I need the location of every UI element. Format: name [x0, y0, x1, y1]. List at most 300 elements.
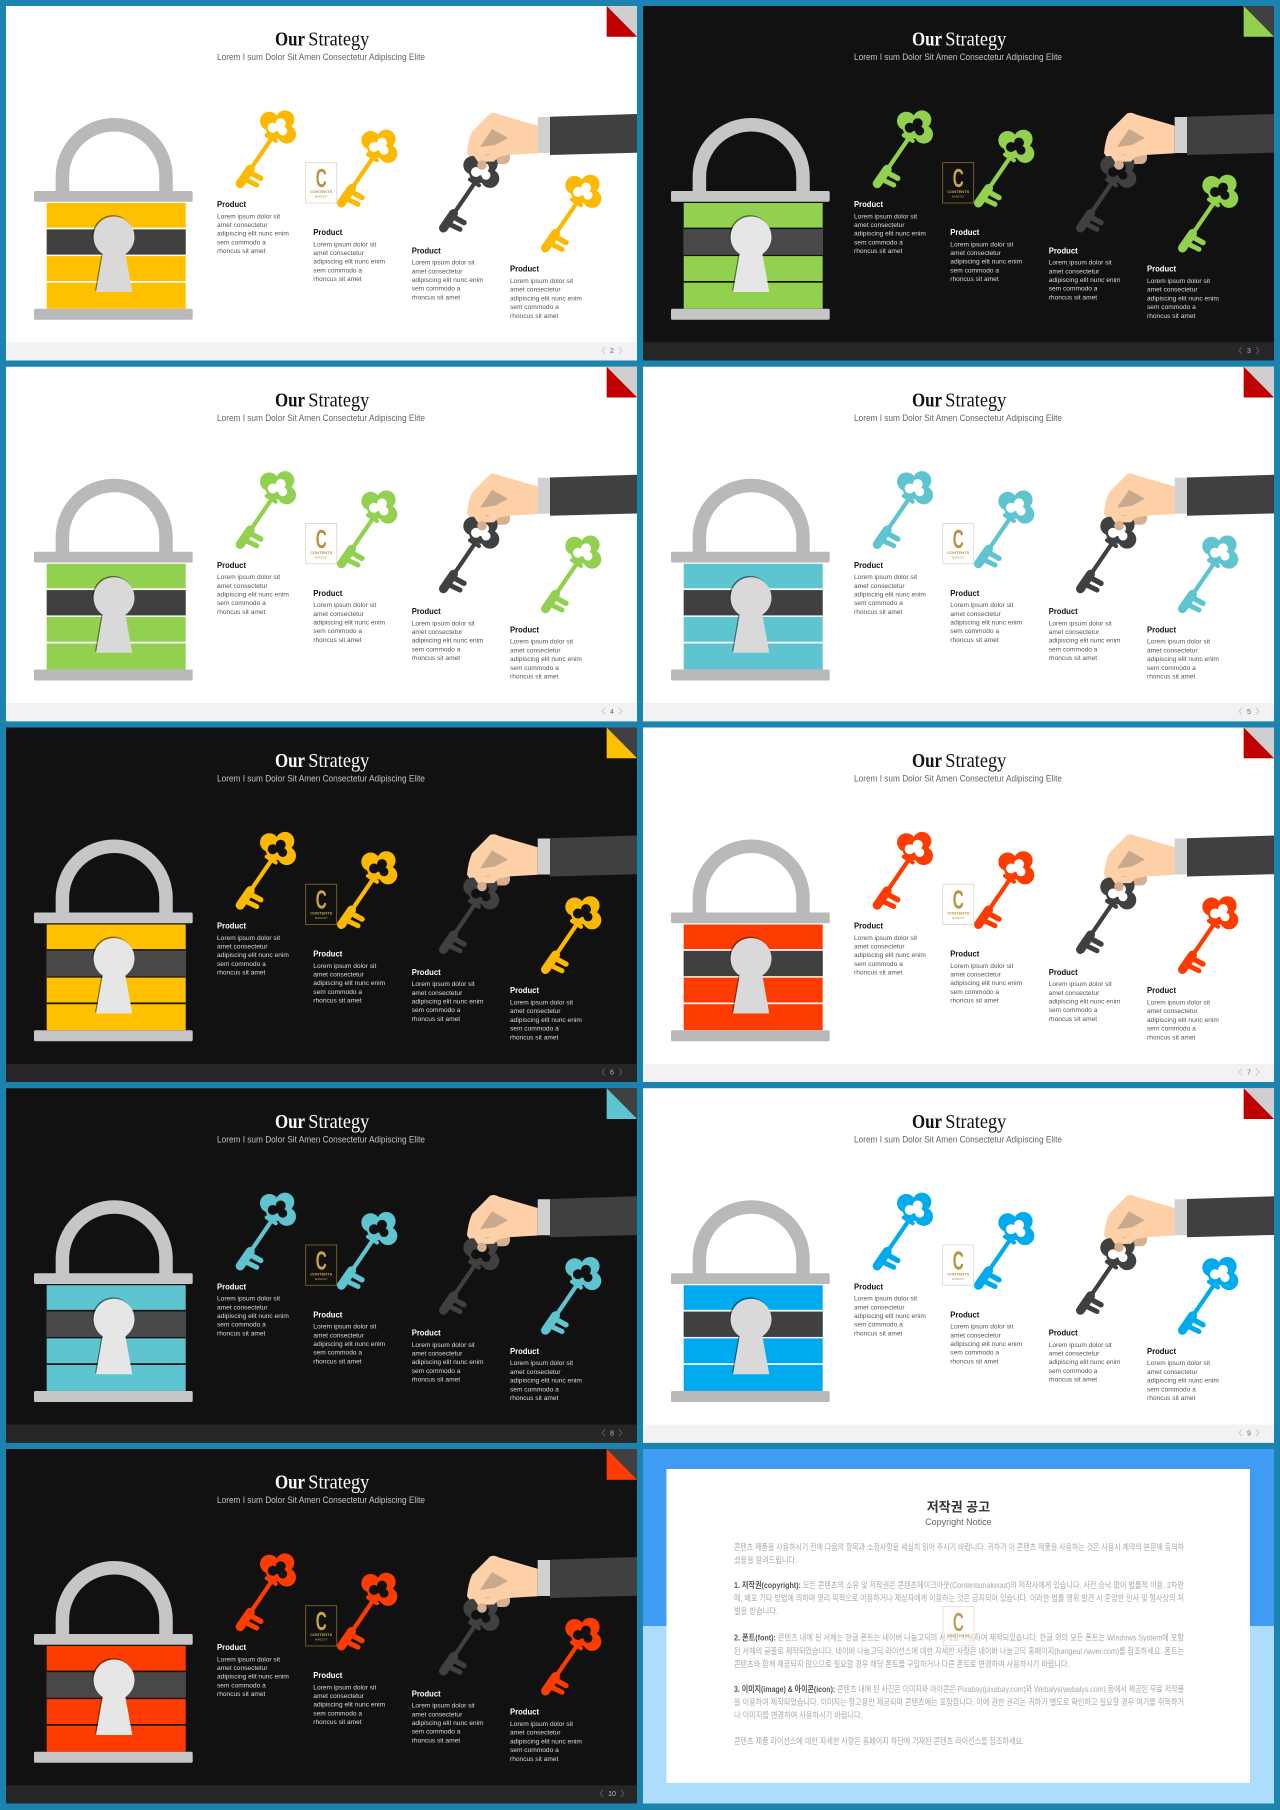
- text block: product 2: Product: [950, 227, 979, 237]
- text block: product 2: Lorem ipsum dolor sit: [313, 1324, 376, 1331]
- subtitle: Lorem I sum Dolor Sit Amen Consectetur Adipiscing Elite: [854, 1134, 1062, 1145]
- logo: CONTENTS: [310, 910, 333, 916]
- text block: product 1: Lorem ipsum dolor sit: [854, 935, 917, 942]
- heading: copyright title: 저작권 공고: [927, 1500, 990, 1514]
- page number: 2: [610, 348, 614, 355]
- panel: slide 4 light green: [6, 367, 637, 721]
- logo: CONTENTS: [310, 550, 333, 555]
- text block: product 4: rhoncus sit amet: [510, 674, 559, 681]
- icon: hand and sleeve: [467, 113, 637, 164]
- title: [275, 389, 369, 411]
- text block: product 1: Lorem ipsum dolor sit: [854, 1296, 917, 1303]
- text block: product 1: rhoncus sit amet: [854, 970, 903, 977]
- text block: product 2: Lorem ipsum dolor sit: [313, 241, 376, 248]
- logo: [306, 1245, 337, 1285]
- text block: product 3: sem commodo a: [412, 1729, 461, 1736]
- logo: CONTENTS: [947, 1271, 970, 1276]
- text block: product 3: rhoncus sit amet: [1049, 294, 1097, 301]
- icon: key 2: [978, 490, 1034, 565]
- logo: C: [316, 163, 327, 193]
- title: [912, 750, 1006, 772]
- title: Strategy: [308, 1111, 369, 1133]
- logo: CONTENTS: [947, 910, 970, 916]
- icon: key 1: [877, 471, 933, 546]
- text block: product 3: amet consectetur: [412, 629, 463, 636]
- logo: [306, 163, 337, 203]
- text block: product 2: amet consectetur: [950, 611, 1002, 618]
- text block: product 4: amet consectetur: [510, 1008, 561, 1015]
- text block: product 1: Product: [217, 1281, 246, 1291]
- text block: product 4: sem commodo a: [1147, 304, 1196, 311]
- text block: product 2: amet consectetur: [313, 250, 365, 257]
- icon: key 1: [877, 832, 933, 906]
- text block: product 3: adipiscing elit nunc enim: [412, 638, 484, 645]
- panel: slide 2 light yellow: [6, 6, 637, 360]
- text block: product 1: Lorem ipsum dolor sit: [217, 935, 280, 942]
- text block: product 2: sem commodo a: [950, 989, 999, 996]
- text block: product 3: rhoncus sit amet: [1049, 1016, 1097, 1023]
- corner flag: [607, 1088, 637, 1119]
- text block: product 3: adipiscing elit nunc enim: [412, 1359, 484, 1366]
- text block: product 3: sem commodo a: [1049, 1368, 1098, 1375]
- logo: CONTENTS: [310, 1271, 333, 1276]
- text block: product 1: [854, 199, 926, 255]
- icon: key 4: [546, 896, 601, 971]
- title: Our: [275, 29, 305, 51]
- title: [912, 1111, 1006, 1133]
- text block: product 2: Product: [950, 1309, 979, 1319]
- text block: product 1: amet consectetur: [217, 944, 268, 950]
- text block: product 4: amet consectetur: [510, 647, 561, 654]
- icon: key 4: [546, 175, 601, 249]
- text block: product 1: Product: [854, 920, 883, 930]
- text block: product 2: Lorem ipsum dolor sit: [950, 1324, 1013, 1331]
- logo: [306, 523, 337, 564]
- text block: product 2: adipiscing elit nunc enim: [950, 1341, 1023, 1348]
- text block: product 3: amet consectetur: [412, 990, 463, 997]
- text block: product 3: sem commodo a: [1049, 286, 1098, 293]
- icon: key 1: [240, 471, 296, 546]
- text block: product 2: rhoncus sit amet: [313, 1358, 362, 1365]
- text block: product 3: adipiscing elit nunc enim: [412, 1720, 484, 1727]
- logo: C: [316, 884, 327, 914]
- text block: image and icon clause: 나 이미지를 변경하여 사용하시기 바랍니다.: [734, 1710, 863, 1720]
- text block: product 2: sem commodo a: [950, 628, 999, 635]
- icon: key 4: [1182, 1257, 1238, 1332]
- text block: product 1: Product: [217, 560, 246, 570]
- icon: dark key held by hand: [1080, 155, 1136, 229]
- text block: product 1: adipiscing elit nunc enim: [217, 591, 289, 598]
- corner flag: [607, 728, 637, 758]
- panel: slide 8 dark teal: [6, 1088, 637, 1443]
- text block: product 1: amet consectetur: [854, 222, 905, 229]
- text block: product 4: Product: [1147, 1346, 1176, 1356]
- text block: product 3: Lorem ipsum dolor sit: [412, 1703, 475, 1710]
- text block: copyright clause: 벌을 받습니다.: [734, 1606, 778, 1616]
- text block: product 4: sem commodo a: [1147, 1026, 1196, 1033]
- page number: 5: [1247, 709, 1251, 716]
- text block: product 4: adipiscing elit nunc enim: [1147, 1378, 1219, 1385]
- text block: product 1: rhoncus sit amet: [217, 609, 266, 616]
- text block: product 4: Lorem ipsum dolor sit: [1147, 1360, 1210, 1367]
- icon: finger through key: [1111, 1236, 1138, 1252]
- icon: key 1: [877, 110, 933, 185]
- text block: product 1: Product: [217, 920, 246, 930]
- text block: product 4: rhoncus sit amet: [510, 1034, 559, 1041]
- text block: product 4: adipiscing elit nunc enim: [510, 1738, 582, 1745]
- logo: [943, 163, 974, 203]
- text block: product 2: rhoncus sit amet: [950, 276, 999, 283]
- text block: product 1: amet consectetur: [217, 222, 268, 229]
- text block: product 2: [950, 948, 1023, 1005]
- text block: product 3: adipiscing elit nunc enim: [1049, 638, 1121, 645]
- text block: product 3: Product: [412, 1328, 441, 1338]
- text block: product 4: Lorem ipsum dolor sit: [510, 1721, 573, 1728]
- text block: product 1: sem commodo a: [217, 961, 266, 968]
- text block: product 3: sem commodo a: [412, 646, 461, 653]
- text block: product 4: [510, 985, 582, 1041]
- text block: product 2: adipiscing elit nunc enim: [950, 259, 1023, 266]
- text block: introduction: 셨음을 알려드립니다.: [734, 1555, 797, 1565]
- logo: [943, 884, 974, 924]
- text block: closing note: 콘텐츠 제품 라이선스에 대한 자세한 사항은 홈페이지 하단에 기재된 콘텐츠 라이선스를 참조하세요.: [734, 1736, 1024, 1746]
- subtitle: Lorem I sum Dolor Sit Amen Consectetur Adipiscing Elite: [854, 413, 1062, 424]
- text block: product 4: amet consectetur: [1147, 647, 1198, 654]
- panel: slide 6 dark yellow: [6, 728, 637, 1082]
- logo: watermark: C: [953, 1607, 964, 1637]
- subheading: copyright notice: Copyright Notice: [925, 1517, 992, 1527]
- text block: product 3: Product: [1049, 245, 1078, 255]
- text block: product 4: Product: [510, 985, 539, 995]
- text block: product 2: Product: [950, 588, 979, 598]
- text block: product 4: amet consectetur: [1147, 287, 1198, 294]
- logo: MAKEOUT: [315, 1277, 328, 1281]
- text block: product 4: sem commodo a: [510, 665, 559, 672]
- text block: product 1: adipiscing elit nunc enim: [854, 591, 926, 598]
- text block: font clause: 콘텐츠와 함께 제공되지 않으므로 필요할 경우 해당 폰트를 구입하거나 다른 폰트로 변경하여 사용하시기 바랍니다.: [734, 1659, 1070, 1669]
- title: Our: [275, 1472, 305, 1494]
- icon: padlock: [671, 485, 830, 680]
- page number: [602, 708, 622, 716]
- icon: hand and sleeve: [1104, 113, 1274, 164]
- corner flag: [607, 367, 637, 397]
- text block: product 4: [510, 1346, 582, 1402]
- text block: product 3: Lorem ipsum dolor sit: [1049, 981, 1112, 988]
- icon: key 2: [342, 1573, 397, 1647]
- text block: product 3: [412, 967, 484, 1023]
- text block: product 4: Product: [1147, 624, 1176, 634]
- title: Strategy: [945, 750, 1006, 772]
- text block: product 2: Lorem ipsum dolor sit: [950, 963, 1013, 970]
- icon: finger through key: [474, 1236, 501, 1252]
- text block: product 3: Lorem ipsum dolor sit: [1049, 620, 1112, 627]
- page number: [1239, 347, 1259, 355]
- text block: product 4: rhoncus sit amet: [510, 313, 559, 320]
- text block: product 3: Lorem ipsum dolor sit: [1049, 1342, 1112, 1349]
- logo: MAKEOUT: [952, 555, 965, 559]
- text block: product 2: sem commodo a: [313, 628, 362, 635]
- text block: product 2: sem commodo a: [313, 1710, 362, 1717]
- panel: slide 9 light blue: [643, 1088, 1274, 1443]
- text block: product 3: Product: [1049, 967, 1078, 977]
- icon: padlock: [34, 1207, 193, 1402]
- text block: product 2: adipiscing elit nunc enim: [950, 980, 1023, 987]
- icon: key 2: [342, 130, 397, 204]
- icon: key 1: [877, 1193, 933, 1267]
- text block: product 3: adipiscing elit nunc enim: [1049, 999, 1121, 1006]
- text block: product 3: Product: [412, 606, 441, 616]
- icon: dark key held by hand: [1080, 876, 1136, 951]
- text block: product 1: adipiscing elit nunc enim: [217, 231, 289, 238]
- text block: product 3: sem commodo a: [1049, 646, 1098, 653]
- text block: product 4: Lorem ipsum dolor sit: [510, 278, 573, 285]
- panel: slide 7 light orange-red: [643, 728, 1274, 1082]
- panel: slide 10 dark orange-red: [6, 1449, 637, 1804]
- title: [912, 29, 1006, 51]
- text block: product 1: adipiscing elit nunc enim: [854, 1313, 926, 1320]
- text block: product 3: Lorem ipsum dolor sit: [412, 981, 475, 988]
- text block: product 1: Lorem ipsum dolor sit: [217, 213, 280, 220]
- text block: product 1: amet consectetur: [854, 583, 905, 590]
- title: Our: [275, 389, 305, 411]
- text block: product 1: adipiscing elit nunc enim: [217, 952, 289, 959]
- text block: product 3: [1049, 967, 1121, 1023]
- icon: key 1: [240, 1553, 296, 1628]
- icon: key 4: [1182, 175, 1238, 249]
- text block: product 1: Lorem ipsum dolor sit: [854, 574, 917, 581]
- text block: product 4: adipiscing elit nunc enim: [1147, 295, 1219, 302]
- text block: font clause: 된 서체의 글꼴로 제작되었습니다. 네이버 나눔고딕 라이선스에 대한 자세한 사항은 네이버 나눔고딕 홈페이지(hangeul.naver.com)를 참조하세요. 폰트는: [734, 1646, 1184, 1656]
- title: Strategy: [308, 750, 369, 772]
- icon: dark key held by hand: [444, 1598, 499, 1672]
- icon: hand and sleeve: [1104, 473, 1274, 525]
- text block: product 4: sem commodo a: [510, 1747, 559, 1754]
- text block: product 4: [1147, 624, 1219, 681]
- text block: product 4: adipiscing elit nunc enim: [510, 1017, 582, 1024]
- text block: product 3: amet consectetur: [1049, 1351, 1100, 1358]
- text block: product 1: rhoncus sit amet: [217, 1691, 266, 1698]
- title: Strategy: [945, 389, 1006, 411]
- text block: product 2: [313, 1309, 386, 1365]
- text block: product 3: adipiscing elit nunc enim: [1049, 1359, 1121, 1366]
- text block: font clause: 2. 폰트(font): 콘텐츠 내에 된 서체는 한글 폰트는 네이버 나눔고딕의 서체를 사용하여 제작되었습니다. 한글 외의 모든 폰트는 Windows System에 포함: [734, 1633, 1184, 1643]
- text block: product 2: [950, 227, 1023, 283]
- subtitle: Lorem I sum Dolor Sit Amen Consectetur Adipiscing Elite: [217, 52, 425, 63]
- text block: product 1: sem commodo a: [854, 239, 903, 246]
- icon: finger through key: [1111, 154, 1138, 170]
- subtitle: Lorem I sum Dolor Sit Amen Consectetur Adipiscing Elite: [217, 413, 425, 424]
- page number: 10: [608, 1791, 616, 1798]
- text block: product 2: amet consectetur: [313, 1332, 365, 1339]
- text block: product 4: adipiscing elit nunc enim: [510, 295, 582, 302]
- text block: product 3: Product: [412, 1688, 441, 1698]
- text block: product 2: rhoncus sit amet: [313, 276, 362, 283]
- icon: padlock: [34, 1568, 193, 1763]
- text block: product 3: adipiscing elit nunc enim: [412, 999, 484, 1006]
- icon: finger through key: [1111, 876, 1138, 891]
- icon: padlock: [34, 846, 193, 1041]
- text block: product 4: [1147, 985, 1219, 1041]
- text block: product 1: amet consectetur: [854, 944, 905, 950]
- logo: C: [953, 884, 964, 914]
- text block: product 2: Product: [313, 1670, 342, 1680]
- text block: product 3: [412, 606, 484, 662]
- text block: product 3: rhoncus sit amet: [412, 294, 460, 301]
- subtitle: Lorem I sum Dolor Sit Amen Consectetur Adipiscing Elite: [217, 1495, 425, 1506]
- text block: product 1: amet consectetur: [854, 1304, 905, 1311]
- text block: product 2: amet consectetur: [950, 250, 1002, 257]
- logo: [943, 1245, 974, 1285]
- text block: product 2: Product: [313, 227, 342, 237]
- text block: product 4: sem commodo a: [510, 1026, 559, 1033]
- text block: product 1: sem commodo a: [217, 600, 266, 607]
- icon: key 2: [978, 1212, 1034, 1287]
- text block: product 2: [950, 1309, 1023, 1365]
- logo: MAKEOUT: [315, 916, 328, 920]
- logo: CONTENTS: [310, 189, 333, 194]
- icon: hand and sleeve: [467, 834, 637, 886]
- page number: [602, 347, 622, 355]
- icon: finger through key: [474, 1597, 501, 1613]
- text block: product 3: Lorem ipsum dolor sit: [412, 1342, 475, 1349]
- text block: product 4: Product: [510, 1346, 539, 1356]
- text block: product 3: [412, 1688, 484, 1744]
- text block: product 2: Lorem ipsum dolor sit: [313, 963, 376, 970]
- icon: key 2: [342, 851, 397, 926]
- text block: product 2: [313, 1670, 386, 1726]
- text block: product 1: rhoncus sit amet: [854, 609, 903, 616]
- icon: finger through key: [474, 154, 501, 170]
- logo: MAKEOUT: [315, 1638, 328, 1642]
- text block: product 2: amet consectetur: [313, 1693, 365, 1700]
- text block: product 4: Lorem ipsum dolor sit: [1147, 639, 1210, 646]
- text block: product 4: [510, 624, 582, 681]
- text block: product 4: [510, 264, 582, 320]
- page number: 3: [1247, 348, 1251, 355]
- text block: product 2: Lorem ipsum dolor sit: [950, 602, 1013, 609]
- icon: hand and sleeve: [467, 473, 637, 525]
- icon: key 2: [342, 1212, 397, 1287]
- text block: product 4: Product: [510, 1707, 539, 1717]
- text block: product 2: rhoncus sit amet: [313, 1719, 362, 1726]
- text block: product 1: amet consectetur: [217, 1665, 268, 1672]
- logo: [306, 1606, 337, 1646]
- icon: key 4: [546, 1257, 601, 1332]
- title: Our: [275, 750, 305, 772]
- text block: product 4: rhoncus sit amet: [1147, 674, 1196, 681]
- title: Our: [912, 29, 942, 51]
- logo: C: [953, 1245, 964, 1275]
- text block: product 2: adipiscing elit nunc enim: [313, 1702, 386, 1709]
- text block: product 4: rhoncus sit amet: [510, 1756, 559, 1763]
- logo: C: [316, 1245, 327, 1275]
- text block: product 2: Lorem ipsum dolor sit: [313, 1684, 376, 1691]
- text block: product 3: rhoncus sit amet: [412, 1377, 460, 1384]
- title: Strategy: [308, 1472, 369, 1494]
- icon: key 4: [1182, 535, 1238, 610]
- text block: product 4: Lorem ipsum dolor sit: [510, 1000, 573, 1007]
- icon: dark key held by hand: [444, 155, 499, 229]
- text block: product 3: amet consectetur: [412, 268, 463, 275]
- text block: introduction: [734, 1542, 1184, 1565]
- text block: copyright clause: 매, 배포 기타 방법에 의하여 영리 목적으로 이용하거나 제삼자에게 이용하는 것은 금지되어 있습니다. 이러한 법률 행위 발견 시 준엄한 민사 및 형사상의 처: [734, 1593, 1184, 1603]
- icon: dark key held by hand: [444, 876, 499, 951]
- icon: padlock: [671, 125, 830, 320]
- text block: product 2: Lorem ipsum dolor sit: [950, 241, 1013, 248]
- page number: [602, 1068, 622, 1076]
- text block: product 2: rhoncus sit amet: [313, 998, 362, 1005]
- text block: product 4: adipiscing elit nunc enim: [1147, 1017, 1219, 1024]
- text block: product 2: rhoncus sit amet: [313, 637, 362, 644]
- text block: product 4: adipiscing elit nunc enim: [510, 1378, 582, 1385]
- logo: MAKEOUT: [315, 555, 328, 559]
- text block: product 4: rhoncus sit amet: [1147, 313, 1196, 320]
- text block: product 3: adipiscing elit nunc enim: [412, 277, 484, 284]
- text block: product 4: amet consectetur: [510, 1369, 561, 1376]
- text block: product 2: Lorem ipsum dolor sit: [313, 602, 376, 609]
- text block: product 3: sem commodo a: [412, 286, 461, 293]
- icon: dark key held by hand: [1080, 1237, 1136, 1312]
- text block: product 2: [313, 948, 386, 1005]
- text block: product 2: sem commodo a: [313, 267, 362, 274]
- text block: product 1: rhoncus sit amet: [854, 248, 903, 255]
- title: [275, 1111, 369, 1133]
- text block: product 3: amet consectetur: [412, 1351, 463, 1358]
- text block: product 1: adipiscing elit nunc enim: [854, 231, 926, 238]
- page number: [1239, 708, 1259, 716]
- page number: 9: [1247, 1430, 1251, 1437]
- text block: product 1: Lorem ipsum dolor sit: [217, 574, 280, 581]
- text block: product 4: sem commodo a: [510, 304, 559, 311]
- text block: product 1: sem commodo a: [217, 239, 266, 246]
- logo: MAKEOUT: [315, 195, 328, 199]
- text block: product 1: rhoncus sit amet: [217, 1330, 266, 1337]
- icon: key 2: [978, 130, 1034, 204]
- page number: [600, 1790, 624, 1798]
- text block: product 3: [1049, 606, 1121, 662]
- text block: product 1: sem commodo a: [217, 1322, 266, 1329]
- logo: C: [953, 163, 964, 193]
- text block: product 4: adipiscing elit nunc enim: [1147, 656, 1219, 663]
- text block: font clause: [734, 1633, 1184, 1669]
- text block: product 2: amet consectetur: [313, 972, 365, 978]
- icon: key 2: [342, 490, 397, 565]
- text block: product 2: Product: [313, 588, 342, 598]
- text block: product 3: Product: [412, 245, 441, 255]
- text block: product 2: sem commodo a: [950, 1350, 999, 1357]
- text block: product 4: Lorem ipsum dolor sit: [510, 1360, 573, 1367]
- text block: product 4: amet consectetur: [1147, 1008, 1198, 1015]
- text block: image and icon clause: 3. 이미지(image) & 아이콘(icon): 콘텐츠 내에 된 사진은 이미지와 아이콘은 Pixabay(pixabay.com)와 Webalys(webalys.com) 등에서 제공된 무료 저작물: [734, 1684, 1184, 1694]
- text block: copyright clause: 1. 저작권(copyright): 모든 콘텐츠의 소유 및 저작권은 콘텐츠메이크아웃(Contentsmakeout)의 저작사에게 있습니다. 사전 승낙 없이 법률적 이용, 2차판: [734, 1580, 1184, 1590]
- text block: product 1: rhoncus sit amet: [217, 248, 266, 255]
- text block: product 2: rhoncus sit amet: [950, 998, 999, 1005]
- icon: key 4: [546, 1618, 601, 1692]
- icon: padlock: [671, 1207, 830, 1402]
- icon: key 1: [240, 832, 296, 906]
- page number: 7: [1247, 1070, 1251, 1076]
- corner flag: [607, 6, 637, 37]
- text block: product 1: sem commodo a: [854, 1322, 903, 1329]
- text block: product 1: sem commodo a: [217, 1682, 266, 1689]
- text block: product 3: [412, 245, 484, 301]
- text block: product 3: [412, 1328, 484, 1384]
- text block: product 2: adipiscing elit nunc enim: [313, 1341, 386, 1348]
- text block: product 3: amet consectetur: [1049, 629, 1100, 636]
- text block: product 4: Lorem ipsum dolor sit: [1147, 1000, 1210, 1007]
- text block: product 2: adipiscing elit nunc enim: [313, 619, 386, 626]
- title: [275, 750, 369, 772]
